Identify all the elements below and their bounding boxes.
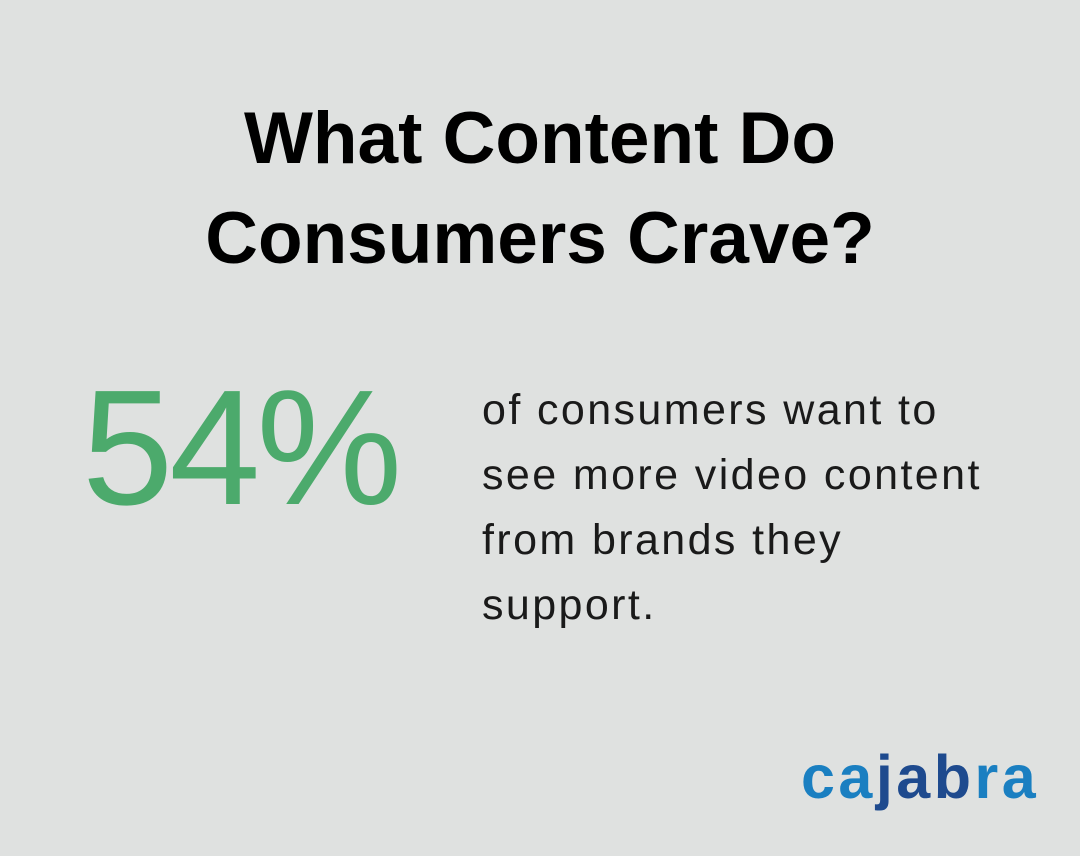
logo: cajabra [801,743,1039,811]
title [205,98,875,279]
title: Consumers Crave? [205,198,875,279]
stat description: support. [482,581,657,629]
stat description: of consumers want to [482,386,939,434]
title: What Content Do [244,98,836,179]
stat description: see more video content [482,451,982,499]
stat description: from brands they [482,516,843,564]
stat number: 54% [82,356,398,539]
stat description [482,386,982,629]
